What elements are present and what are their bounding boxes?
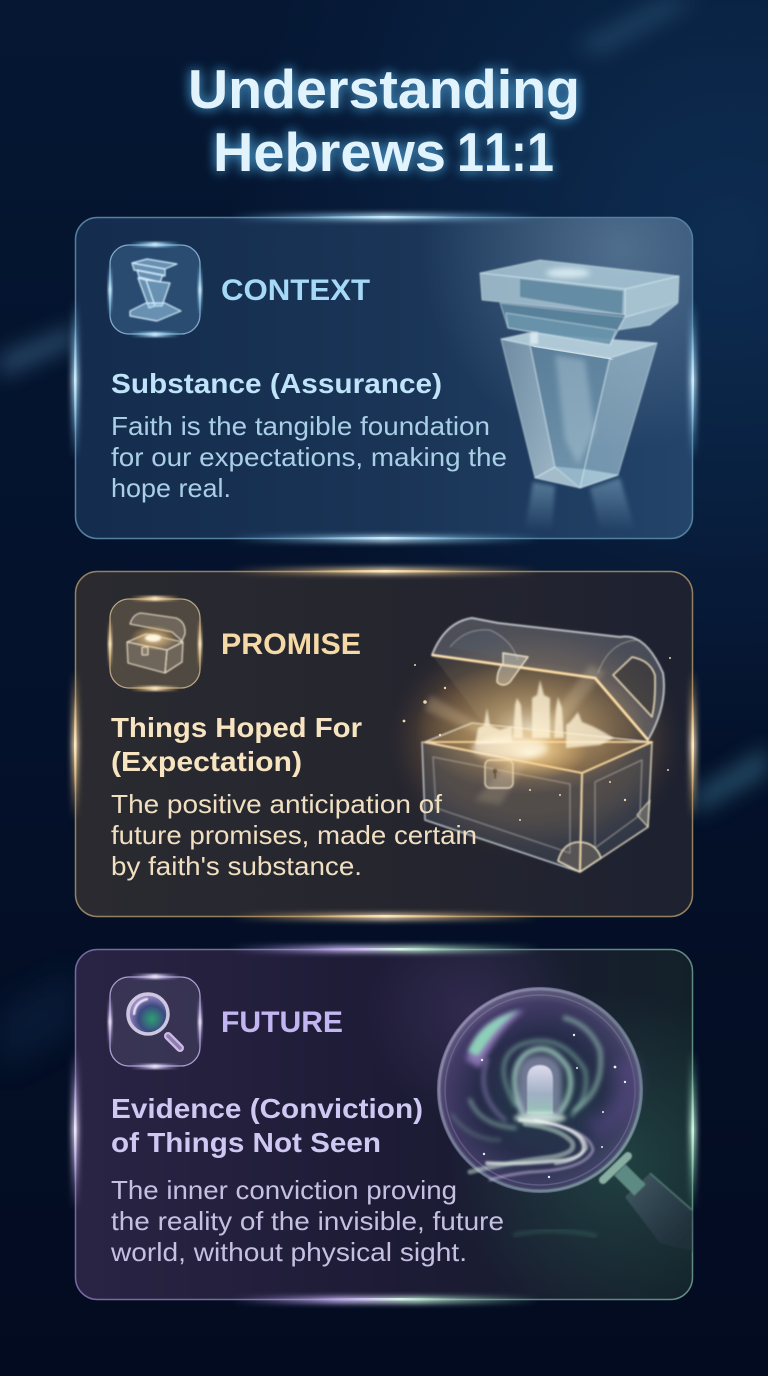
icon: crystal pillar [108,242,202,337]
text: promise description: future promises, made certain [111,820,477,850]
heading: evidence: of Things Not Seen [111,1127,381,1158]
title: Hebrews [213,121,446,183]
text: promise description [111,789,477,881]
text: substance description: Faith is the tangible foundation [111,411,490,441]
text: substance description [111,411,507,503]
title: 11:1 [457,121,554,183]
text: evidence description: world, without physical sight. [110,1237,467,1267]
label: context: CONTEXT [221,274,370,307]
icon: treasure chest [108,596,202,691]
heading: substance: Substance (Assurance) [111,368,442,399]
panel: promise [72,568,696,920]
heading: evidence: Evidence (Conviction) [111,1093,423,1124]
panel: future [72,946,700,1303]
text: promise description: by faith's substance. [111,851,362,881]
illustration: magnifying glass over path [437,987,700,1254]
title [188,58,580,183]
heading: things hoped for: Things Hoped For [111,712,362,743]
label: future: FUTURE [221,1006,343,1039]
heading: evidence [111,1093,423,1158]
text: evidence description [110,1175,504,1267]
illustration: glowing chest [403,618,671,872]
text: evidence description: The inner conviction proving [111,1175,457,1205]
text: substance description: for our expectations, making the [111,442,507,472]
heading: things hoped for: (Expectation) [111,746,302,777]
illustration: glass pillar [480,260,679,530]
text: promise description: The positive anticipation of [111,789,443,819]
panel: context [72,214,696,542]
label: promise: PROMISE [221,628,361,661]
text: evidence description: the reality of the invisible, future [111,1206,504,1236]
text: substance description: hope real. [111,473,231,503]
title: Understanding [188,58,580,120]
icon: magnifying glass [108,974,202,1069]
heading: things hoped for [111,712,362,777]
